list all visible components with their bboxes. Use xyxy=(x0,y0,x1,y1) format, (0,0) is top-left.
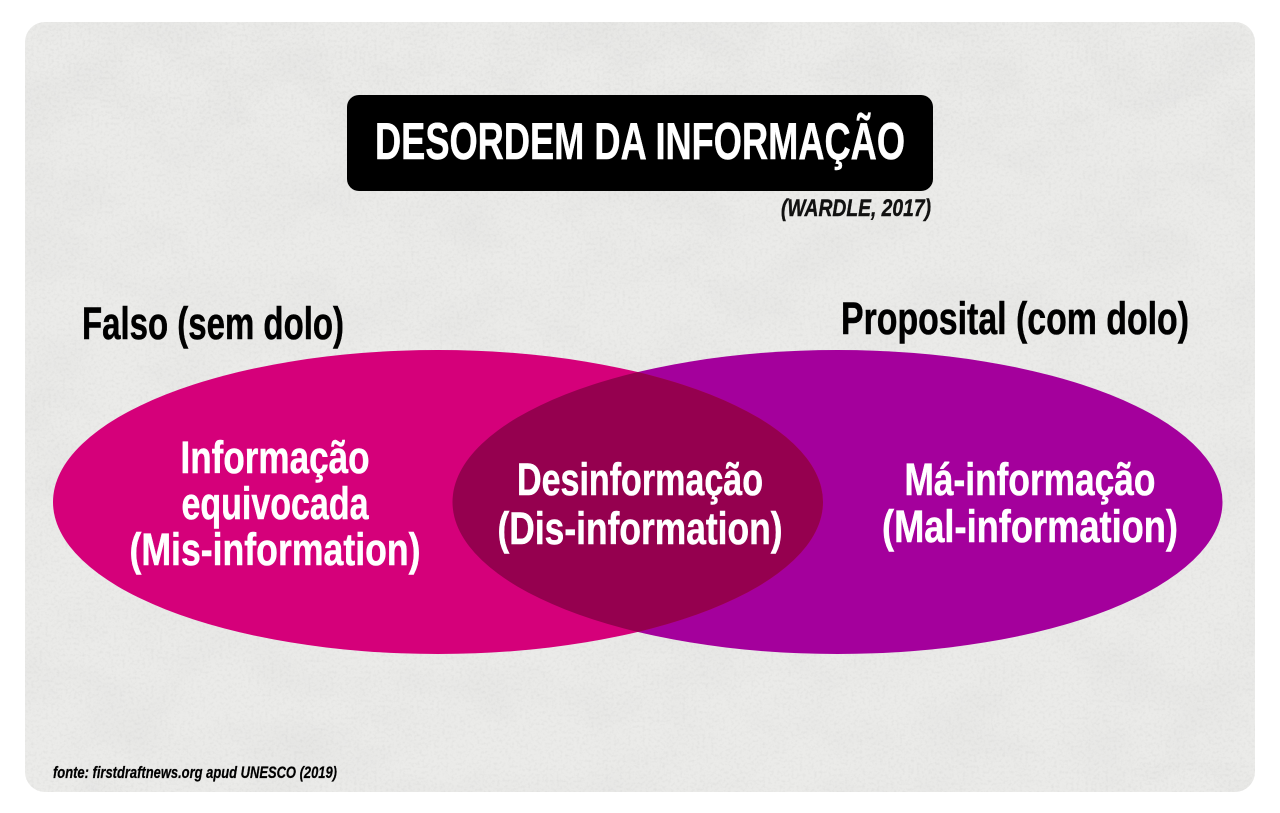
label: mal-information: (Mal-information) xyxy=(882,501,1178,552)
circle: overlap xyxy=(452,372,823,632)
label: dis-information xyxy=(498,454,782,554)
label: mis-information: Informação xyxy=(180,432,370,483)
circle: left ellipse xyxy=(53,350,823,654)
label: dis-information: Desinformação xyxy=(517,454,763,505)
label: mis-information xyxy=(130,432,420,575)
venn diagram xyxy=(53,350,1222,654)
title: DESORDEM DA INFORMAÇÃO xyxy=(375,112,905,171)
label: mis-information: equivocada xyxy=(182,478,369,529)
label: mis-information: (Mis-information) xyxy=(130,524,420,575)
title xyxy=(347,95,933,191)
heading: false without intent: Falso (sem dolo) xyxy=(82,298,344,349)
label: mal-information xyxy=(882,454,1178,552)
label: dis-information: (Dis-information) xyxy=(498,503,782,554)
circle: right ellipse xyxy=(452,350,1222,654)
source note: fonte: firstdraftnews.org apud UNESCO (2019) xyxy=(53,763,337,782)
citation: (WARDLE, 2017) xyxy=(781,195,931,222)
label: mal-information: Má-informação xyxy=(904,454,1156,505)
